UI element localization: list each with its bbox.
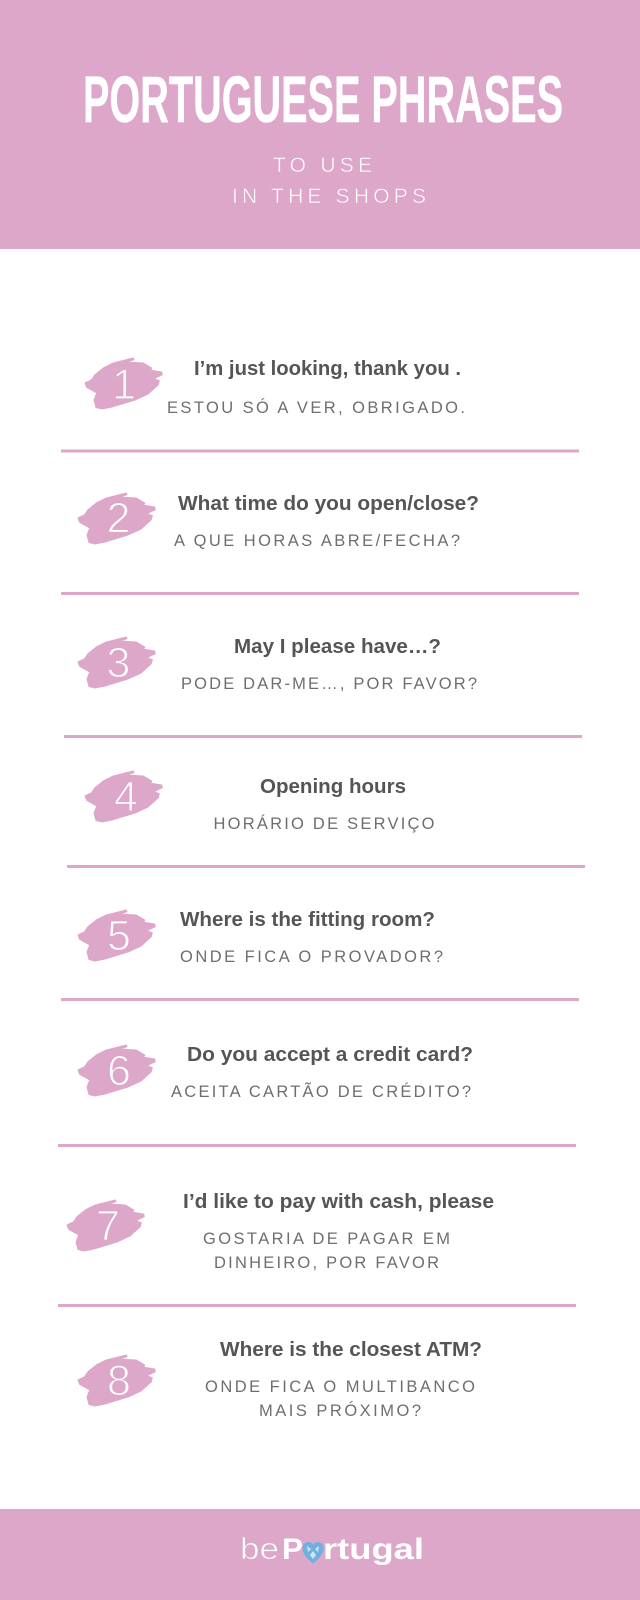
- brush number 3: [78, 637, 155, 688]
- English phrase: Where is the closest ATM?: [220, 1339, 482, 1361]
- phrase 6: [78, 1044, 473, 1101]
- brush number 8: 8: [107, 1357, 131, 1405]
- Portuguese phrase: ONDE FICA O PROVADOR?: [180, 948, 443, 966]
- phrase 8: [78, 1339, 482, 1420]
- brush number 4: [85, 771, 162, 822]
- brush number 2: 2: [107, 494, 130, 542]
- English phrase: What time do you open/close?: [178, 493, 479, 515]
- brush number 7: 7: [96, 1202, 120, 1250]
- Portuguese phrase: PODE DAR-ME…, POR FAVOR?: [181, 675, 477, 693]
- English phrase: Opening hours: [260, 776, 406, 798]
- logo: rtugal: [323, 1533, 424, 1566]
- phrase 4: [85, 771, 435, 833]
- icon: blue heart: [302, 1542, 324, 1564]
- subtitle: TO USE: [273, 154, 372, 177]
- brush number 5: 5: [107, 912, 131, 960]
- brush number 6: [78, 1045, 155, 1096]
- brush number 5: [78, 910, 155, 961]
- phrase 2: [78, 493, 479, 550]
- Portuguese phrase: ESTOU SÓ A VER, OBRIGADO.: [167, 398, 465, 417]
- brush number 8: [78, 1355, 155, 1406]
- brush number 3: 3: [107, 639, 130, 687]
- brush number 6: 6: [107, 1047, 131, 1095]
- brush number 1: 1: [112, 361, 136, 409]
- Portuguese phrase: ONDE FICA O MULTIBANCO: [205, 1378, 475, 1396]
- Portuguese phrase: [205, 1378, 475, 1420]
- phrase 3: [78, 636, 477, 693]
- English phrase: May I please have…?: [234, 636, 441, 658]
- subtitle: IN THE SHOPS: [232, 185, 426, 208]
- phrase 5: [78, 909, 443, 966]
- Portuguese phrase: ACEITA CARTÃO DE CRÉDITO?: [171, 1081, 471, 1101]
- logo: [240, 1531, 424, 1566]
- Portuguese phrase: A QUE HORAS ABRE/FECHA?: [174, 532, 460, 550]
- English phrase: I’d like to pay with cash, please: [183, 1191, 494, 1213]
- Portuguese phrase: MAIS PRÓXIMO?: [259, 1401, 421, 1420]
- phrase 7: [67, 1191, 494, 1272]
- brush number 4: 4: [114, 773, 138, 821]
- English phrase: I’m just looking, thank you .: [194, 358, 461, 380]
- Portuguese phrase: GOSTARIA DE PAGAR EM: [203, 1230, 450, 1248]
- English phrase: Do you accept a credit card?: [187, 1044, 473, 1066]
- brush number 1: [85, 358, 162, 409]
- header panel: [0, 0, 640, 249]
- brush number 2: [78, 493, 155, 544]
- Portuguese phrase: [203, 1230, 450, 1272]
- English phrase: Where is the fitting room?: [180, 909, 435, 931]
- brush number 7: [67, 1200, 144, 1251]
- Portuguese phrase: HORÁRIO DE SERVIÇO: [214, 814, 435, 833]
- logo: be: [240, 1531, 279, 1566]
- subtitle: [232, 154, 426, 208]
- logo: P: [282, 1533, 303, 1566]
- footer panel: [0, 1509, 640, 1600]
- Portuguese phrase: DINHEIRO, POR FAVOR: [214, 1254, 439, 1272]
- phrase 1: [85, 358, 465, 417]
